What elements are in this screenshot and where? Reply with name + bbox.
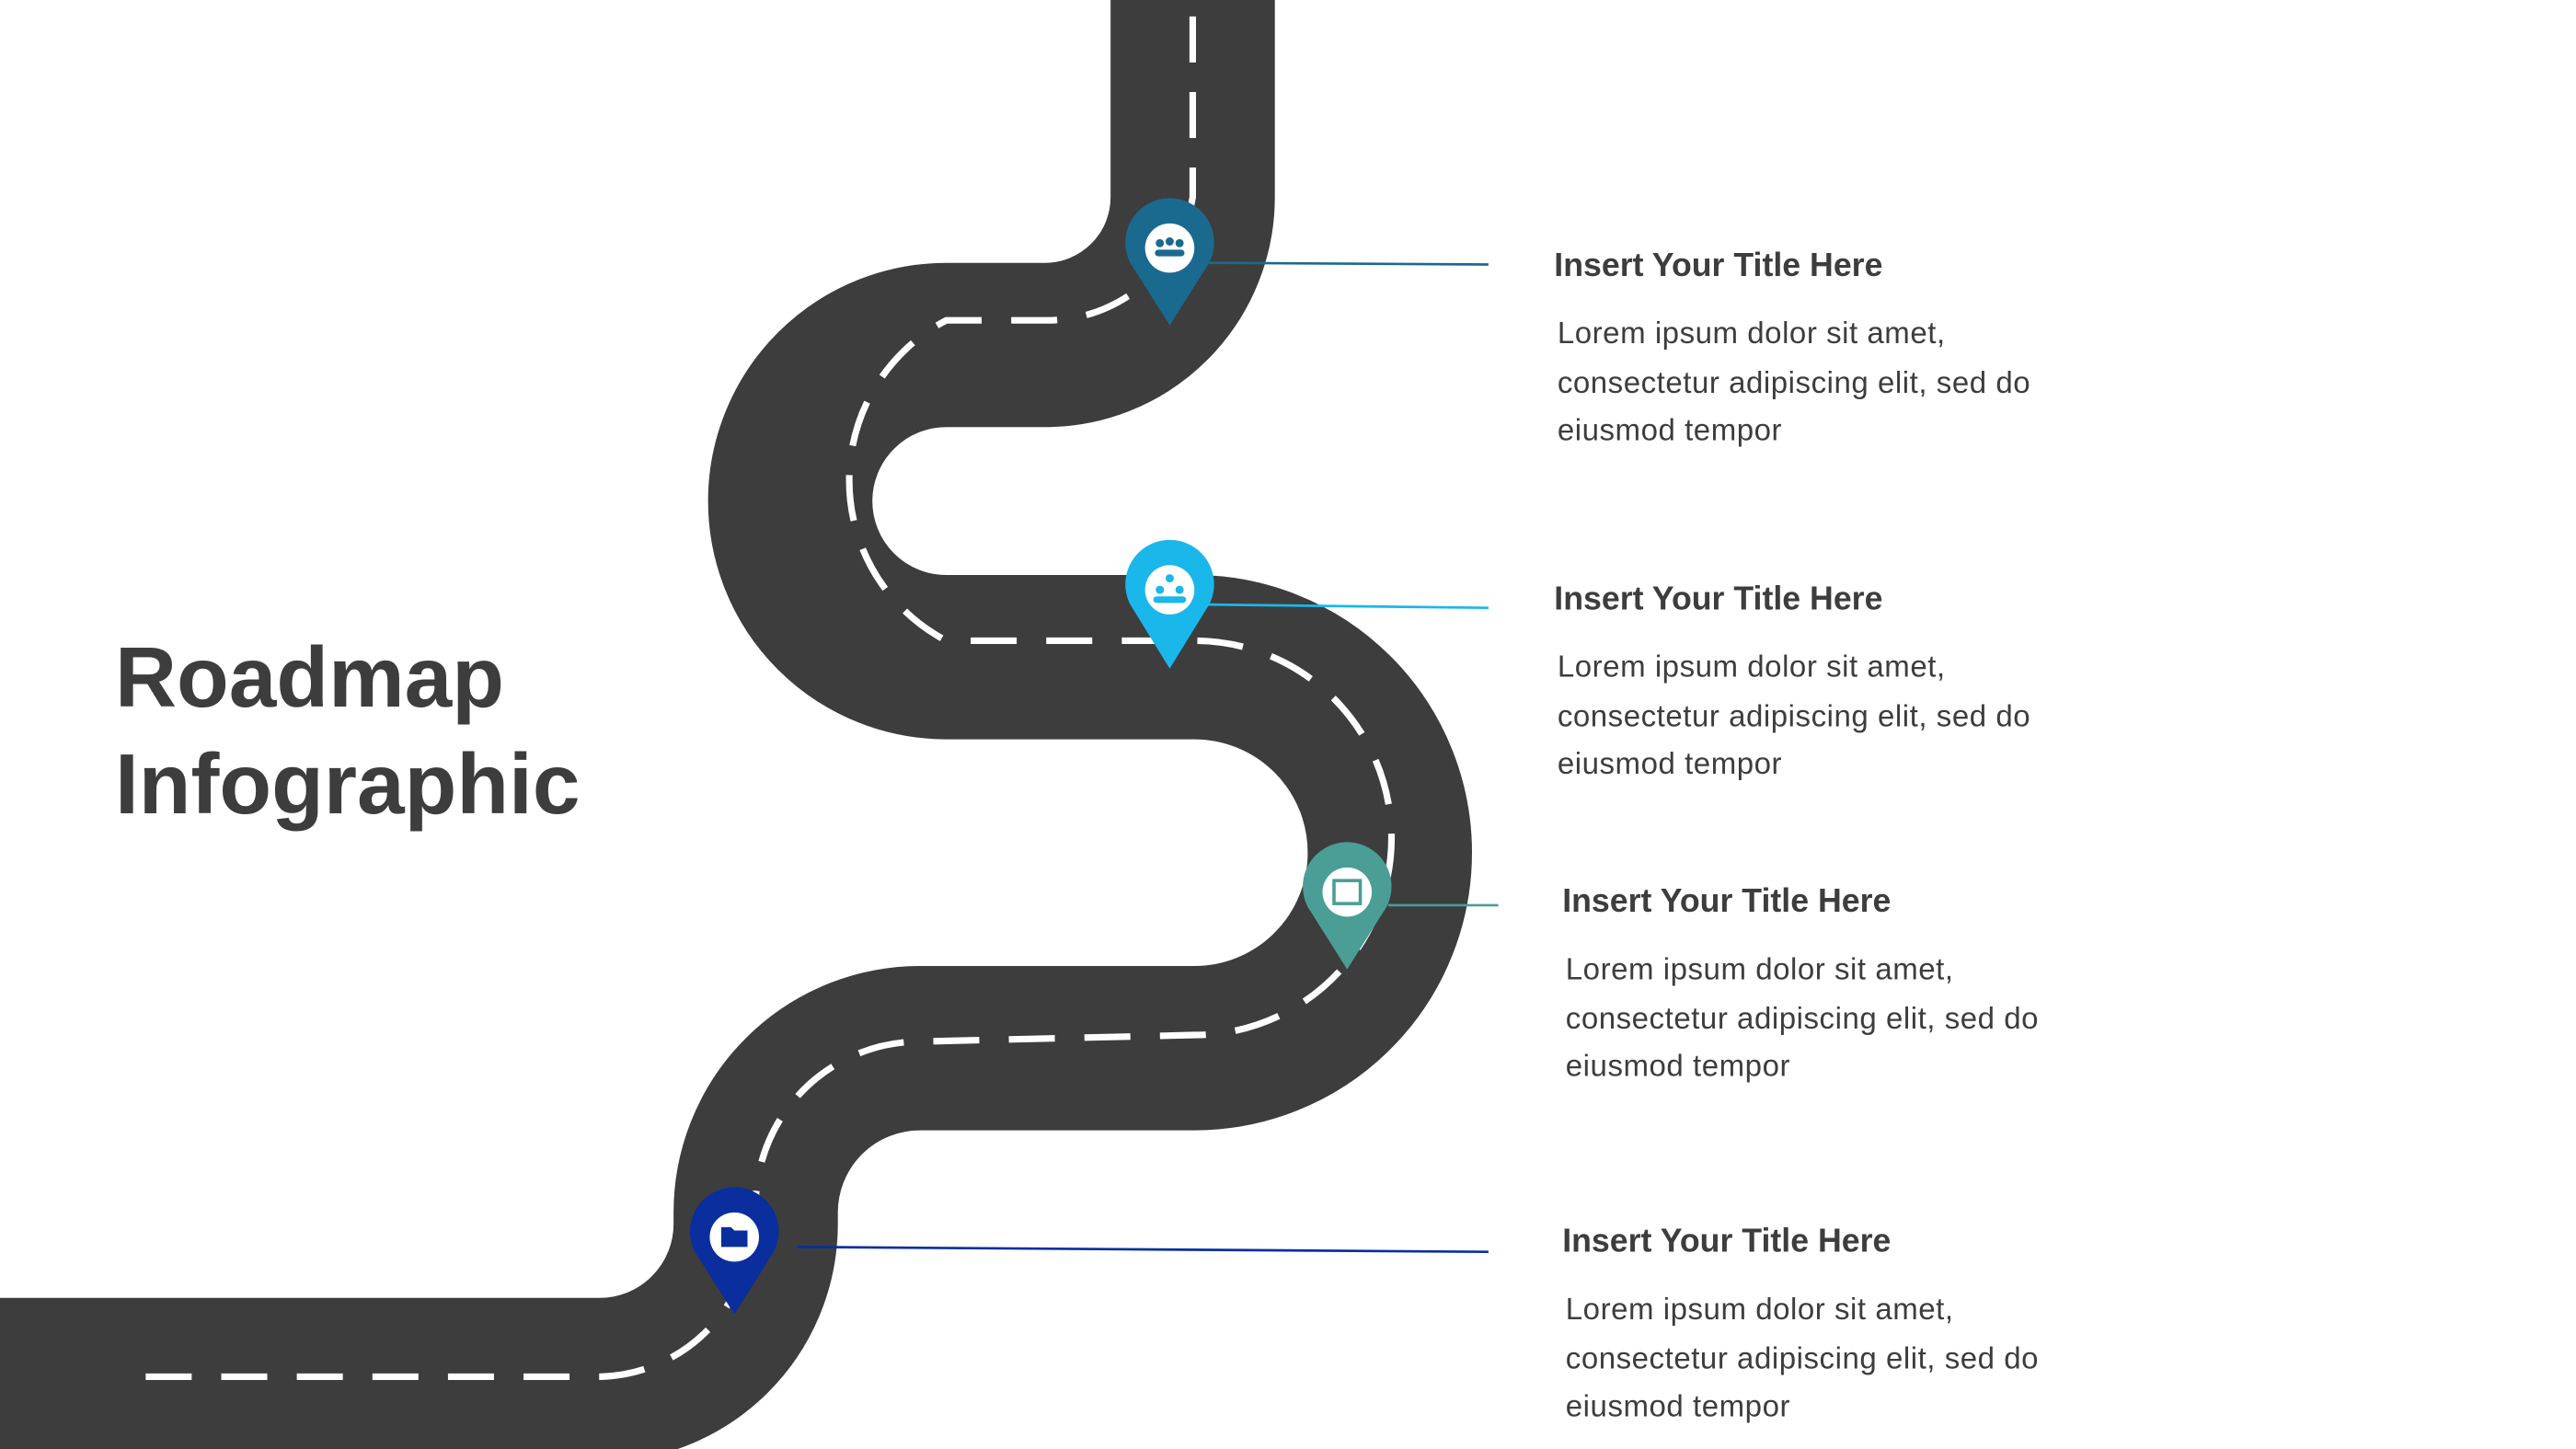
text block 2: Lorem ipsum dolor sit amet, bbox=[1558, 650, 1946, 684]
text block 4 bbox=[1562, 1223, 2039, 1422]
pin 3: calendar bbox=[1303, 842, 1391, 970]
text block 3: consectetur adipiscing elit, sed do bbox=[1566, 1001, 2039, 1035]
text block 2: consectetur adipiscing elit, sed do bbox=[1558, 698, 2030, 732]
title: Infographic bbox=[115, 736, 580, 832]
text block 4: consectetur adipiscing elit, sed do bbox=[1566, 1341, 2039, 1375]
text block 4: Insert Your Title Here bbox=[1562, 1223, 1891, 1259]
text block 2: Insert Your Title Here bbox=[1554, 580, 1882, 616]
connector lines bbox=[797, 263, 1499, 1252]
text block 1: eiusmod tempor bbox=[1558, 413, 1782, 447]
pin 4: folder bbox=[690, 1187, 778, 1315]
text block 1 bbox=[1554, 247, 2030, 447]
pin 2: people bbox=[1125, 540, 1214, 669]
road bbox=[0, 0, 1392, 1380]
text block 3 bbox=[1562, 882, 2039, 1083]
title: Roadmap bbox=[115, 629, 504, 725]
text block 3: eiusmod tempor bbox=[1566, 1049, 1790, 1083]
text block 3: Insert Your Title Here bbox=[1562, 882, 1891, 919]
text block 1: Lorem ipsum dolor sit amet, bbox=[1558, 316, 1946, 350]
text block 4: Lorem ipsum dolor sit amet, bbox=[1566, 1292, 1954, 1326]
text block 4: eiusmod tempor bbox=[1566, 1388, 1790, 1422]
pin 1: team bbox=[1125, 198, 1214, 326]
text block 2: eiusmod tempor bbox=[1558, 746, 1782, 780]
text block 2 bbox=[1554, 580, 2030, 780]
title bbox=[115, 629, 580, 832]
text block 1: consectetur adipiscing elit, sed do bbox=[1558, 365, 2030, 399]
text block 3: Lorem ipsum dolor sit amet, bbox=[1566, 951, 1954, 985]
text block 1: Insert Your Title Here bbox=[1554, 247, 1882, 283]
